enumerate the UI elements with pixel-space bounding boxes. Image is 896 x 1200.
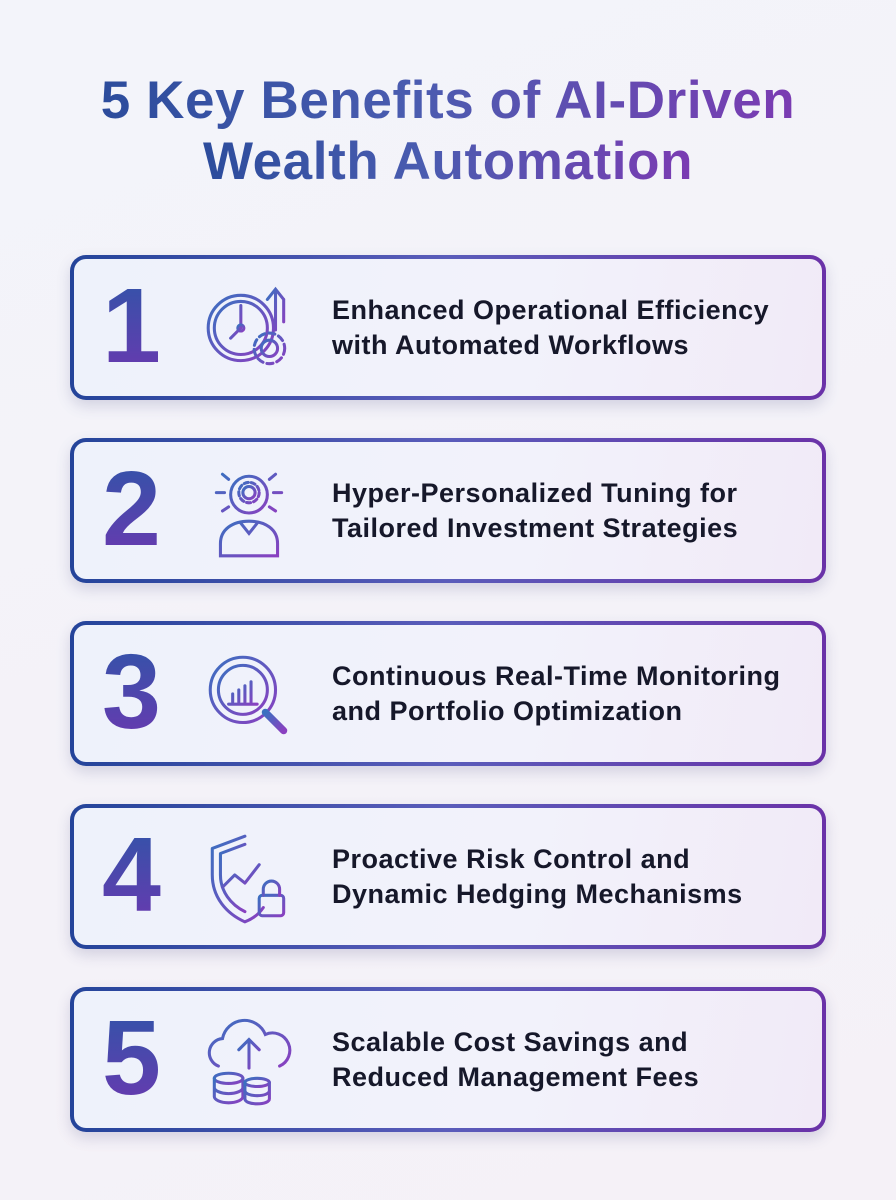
number 4: 4: [102, 816, 161, 934]
text: Tailored Investment Strategies: [332, 513, 738, 543]
title: Wealth Automation: [203, 132, 693, 191]
panel: benefit 2: [70, 438, 826, 583]
text: [332, 478, 738, 543]
text: Enhanced Operational Efficiency: [332, 295, 769, 325]
icon: shield lock: [210, 834, 286, 924]
title: 5 Key Benefits of AI-Driven: [101, 71, 795, 130]
text: Hyper-Personalized Tuning for: [332, 478, 738, 508]
panel: benefit 5: [70, 987, 826, 1132]
number 3: 3: [102, 633, 161, 751]
icon: clock gear arrow: [206, 286, 286, 366]
text: [332, 661, 780, 726]
text: Continuous Real-Time Monitoring: [332, 661, 780, 691]
icon: person with gear: [214, 472, 284, 558]
number 1: 1: [102, 267, 161, 385]
text: Dynamic Hedging Mechanisms: [332, 879, 743, 909]
title: [101, 71, 795, 191]
text: Scalable Cost Savings and: [332, 1027, 688, 1057]
icon: cloud coins: [208, 1018, 292, 1106]
panel: benefit 4: [70, 804, 826, 949]
icon: magnifier chart: [208, 656, 288, 734]
number 2: 2: [102, 450, 161, 568]
panel: benefit 1: [70, 255, 826, 400]
panel: benefit 3: [70, 621, 826, 766]
text: with Automated Workflows: [332, 330, 689, 360]
text: Reduced Management Fees: [332, 1062, 699, 1092]
text: [332, 844, 743, 909]
text: [332, 1027, 699, 1092]
text: and Portfolio Optimization: [332, 696, 682, 726]
text: [332, 295, 769, 360]
text: Proactive Risk Control and: [332, 844, 690, 874]
number 5: 5: [102, 999, 161, 1117]
